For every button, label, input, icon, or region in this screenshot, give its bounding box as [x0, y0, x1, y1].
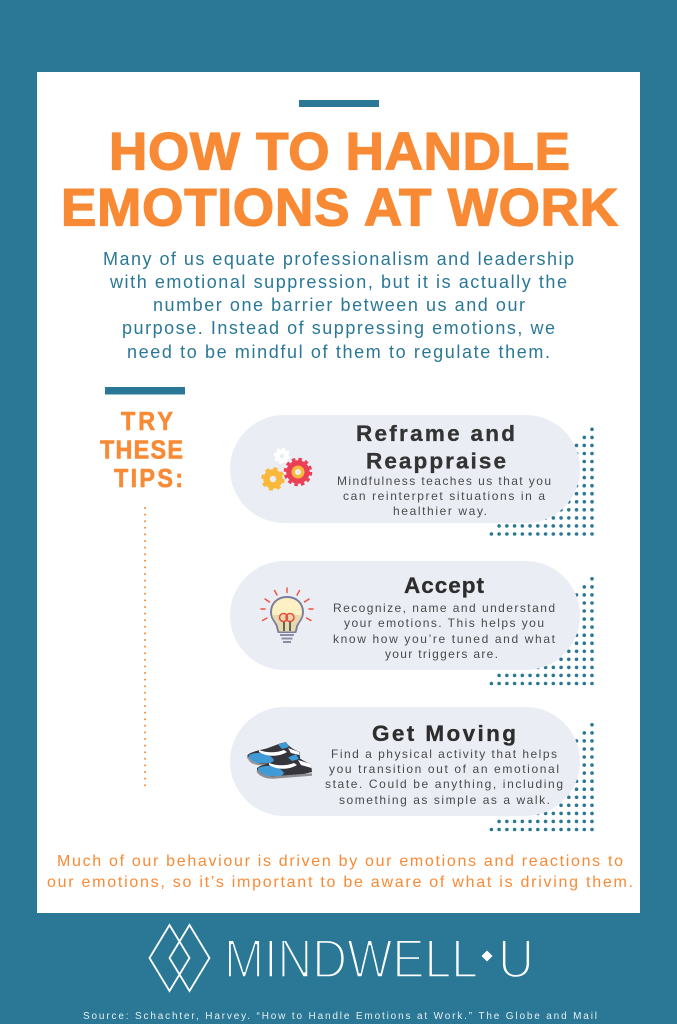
wordmark: U [498, 928, 534, 990]
logo mark [150, 925, 210, 991]
closing statement [47, 853, 633, 891]
logo: mindwell u [150, 925, 534, 991]
intro paragraph: with emotional suppression, but it is actually the [109, 272, 567, 292]
title [61, 122, 618, 238]
closing statement: our emotions, so it’s important to be aware of what is driving them. [47, 874, 633, 891]
body text 3 [325, 747, 563, 807]
pill 2 [230, 561, 580, 670]
tip 1: reframe and reappraise [230, 415, 592, 534]
body text 1: Mindfulness teaches us that you [337, 474, 551, 488]
body text 2: know how you’re tuned and what [333, 632, 556, 646]
icon: light bulb [261, 588, 313, 642]
intro paragraph [103, 249, 574, 362]
dot pattern 2 [491, 579, 592, 684]
pill 1 [230, 415, 580, 523]
tip 3: get moving [230, 707, 592, 830]
dotted connector line [144, 508, 146, 786]
pill 3 [230, 707, 580, 816]
icon: gears [263, 449, 310, 489]
heading 1: Reappraise [366, 448, 506, 474]
dot pattern 1 [491, 429, 592, 534]
front shoe [257, 754, 312, 778]
body text 3: state. Could be anything, including [325, 777, 563, 791]
try these tips heading: THESE [100, 436, 183, 465]
intro paragraph: number one barrier between us and our [153, 295, 525, 315]
body text 3: you transition out of an emotional [329, 762, 559, 776]
title: EMOTIONS AT WORK [61, 178, 618, 238]
title: HOW TO HANDLE [109, 122, 570, 182]
dot pattern 3 [491, 725, 592, 830]
heading 2: Accept [404, 573, 484, 598]
body text 1: can reinterpret situations in a [343, 489, 545, 503]
intro paragraph: Many of us equate professionalism and leadership [103, 249, 574, 269]
body text 3: Find a physical activity that helps [331, 747, 557, 761]
body text 2: your emotions. This helps you [344, 616, 544, 630]
body text 2 [333, 601, 556, 661]
white panel [37, 72, 640, 913]
intro paragraph: need to be mindful of them to regulate them. [127, 342, 550, 362]
try these tips heading: TIPS: [114, 465, 183, 493]
body text 1: healthier way. [393, 504, 487, 518]
source line: Source: Schachter, Harvey. “How to Handle Emotions at Work.” The Globe and Mail [83, 1011, 597, 1022]
top accent bar [299, 100, 379, 107]
tip 2: accept [230, 561, 592, 684]
try these tips heading: TRY [121, 408, 173, 436]
intro paragraph: purpose. Instead of suppressing emotions, we [122, 318, 555, 338]
icon: running shoes [247, 742, 312, 778]
heading 3: Get Moving [372, 721, 516, 746]
wordmark: MINDWELL [224, 928, 478, 990]
closing statement: Much of our behaviour is driven by our emotions and reactions to [57, 853, 623, 870]
heading 1 [356, 421, 515, 474]
back shoe [247, 742, 300, 765]
heading 1: Reframe and [356, 421, 515, 446]
tips accent bar [105, 387, 185, 394]
logo diamond separator [482, 950, 492, 962]
body text 1 [337, 474, 551, 518]
body text 2: Recognize, name and understand [333, 601, 555, 615]
body text 2: your triggers are. [385, 647, 498, 661]
body text 3: something as simple as a walk. [339, 793, 550, 807]
try these tips heading [100, 408, 183, 493]
